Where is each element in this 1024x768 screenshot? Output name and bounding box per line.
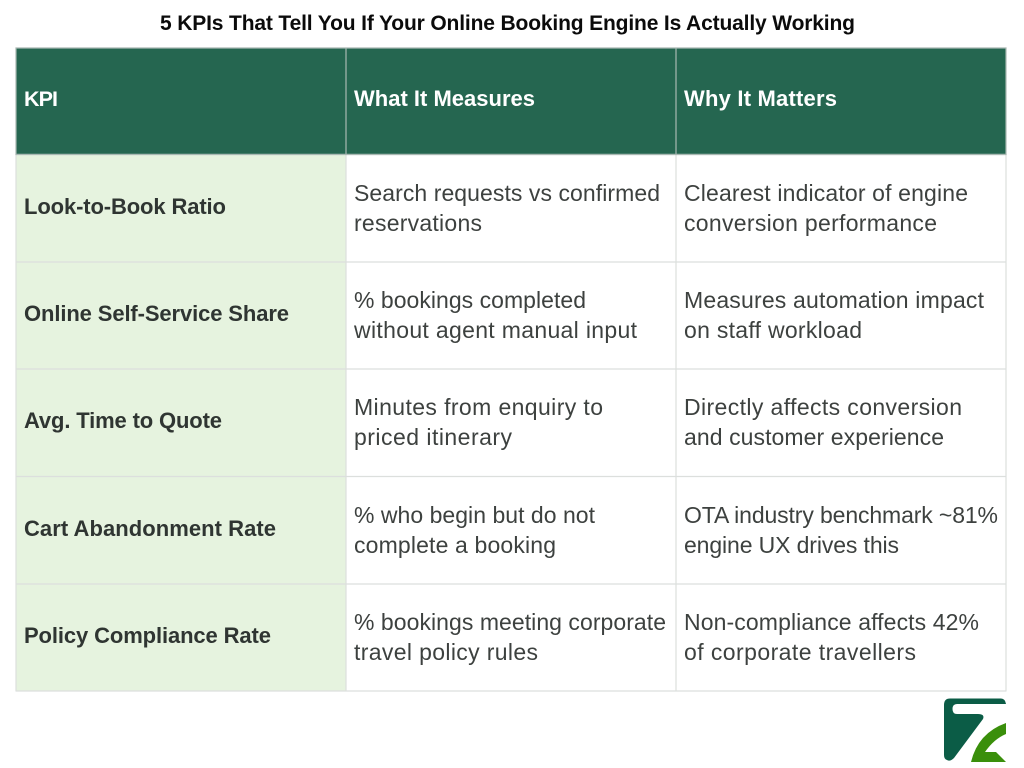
row 3: Avg. Time to Quote: Directly affects conversion	[684, 394, 962, 420]
row 2: Online Self-Service Share: on staff workload	[684, 317, 862, 343]
row 5: Policy Compliance Rate	[24, 609, 979, 665]
row 2: Online Self-Service Share: without agent manual input	[353, 317, 638, 343]
row 4: Cart Abandonment Rate: OTA industry benchmark ~81%	[684, 502, 998, 528]
row 1: Look-to-Book Ratio: Search requests vs confirmed	[354, 180, 660, 206]
header row	[16, 48, 1006, 154]
KPI column background	[16, 154, 346, 691]
row 5: Policy Compliance Rate: Non-compliance affects 42%	[684, 609, 979, 635]
row 1: Look-to-Book Ratio	[24, 180, 968, 236]
row 3: Avg. Time to Quote	[24, 394, 962, 450]
row 4: Cart Abandonment Rate: % who begin but do not	[354, 502, 596, 528]
header: What It Measures: What It Measures	[354, 86, 535, 111]
row 4: Cart Abandonment Rate: Cart Abandonment Rate	[24, 516, 276, 541]
logo	[944, 698, 1006, 762]
row 5: Policy Compliance Rate: travel policy rules	[354, 639, 538, 665]
title: 5 KPIs That Tell You If Your Online Booking Engine Is Actually Working	[160, 12, 855, 35]
row 3: Avg. Time to Quote: and customer experience	[684, 424, 944, 450]
row 2: Online Self-Service Share	[24, 287, 985, 343]
row 5: Policy Compliance Rate: Policy Compliance Rate	[24, 623, 271, 648]
row 2: Online Self-Service Share: % bookings completed	[354, 287, 586, 313]
logo: light green mark	[971, 723, 1006, 762]
row 3: Avg. Time to Quote: priced itinerary	[354, 424, 512, 450]
row 4: Cart Abandonment Rate: engine UX drives this	[684, 532, 899, 558]
row 1: Look-to-Book Ratio: Look-to-Book Ratio	[24, 194, 226, 219]
row 5: Policy Compliance Rate: of corporate travellers	[684, 639, 916, 665]
header: KPI: KPI	[24, 87, 58, 111]
row 4: Cart Abandonment Rate: complete a booking	[354, 532, 556, 558]
row 4: Cart Abandonment Rate	[24, 502, 998, 558]
header: Why It Matters: Why It Matters	[684, 86, 837, 111]
row 5: Policy Compliance Rate: % bookings meeting corporate	[354, 609, 666, 635]
row 1: Look-to-Book Ratio: reservations	[354, 210, 482, 236]
row 3: Avg. Time to Quote: Avg. Time to Quote	[24, 408, 222, 433]
logo: dark green mark	[944, 698, 1006, 761]
row 2: Online Self-Service Share: Measures automation impact	[684, 287, 985, 313]
row 3: Avg. Time to Quote: Minutes from enquiry to	[354, 394, 603, 420]
row 1: Look-to-Book Ratio: Clearest indicator of engine	[684, 180, 968, 206]
row 1: Look-to-Book Ratio: conversion performance	[684, 210, 937, 236]
row 2: Online Self-Service Share: Online Self-Service Share	[24, 301, 289, 326]
